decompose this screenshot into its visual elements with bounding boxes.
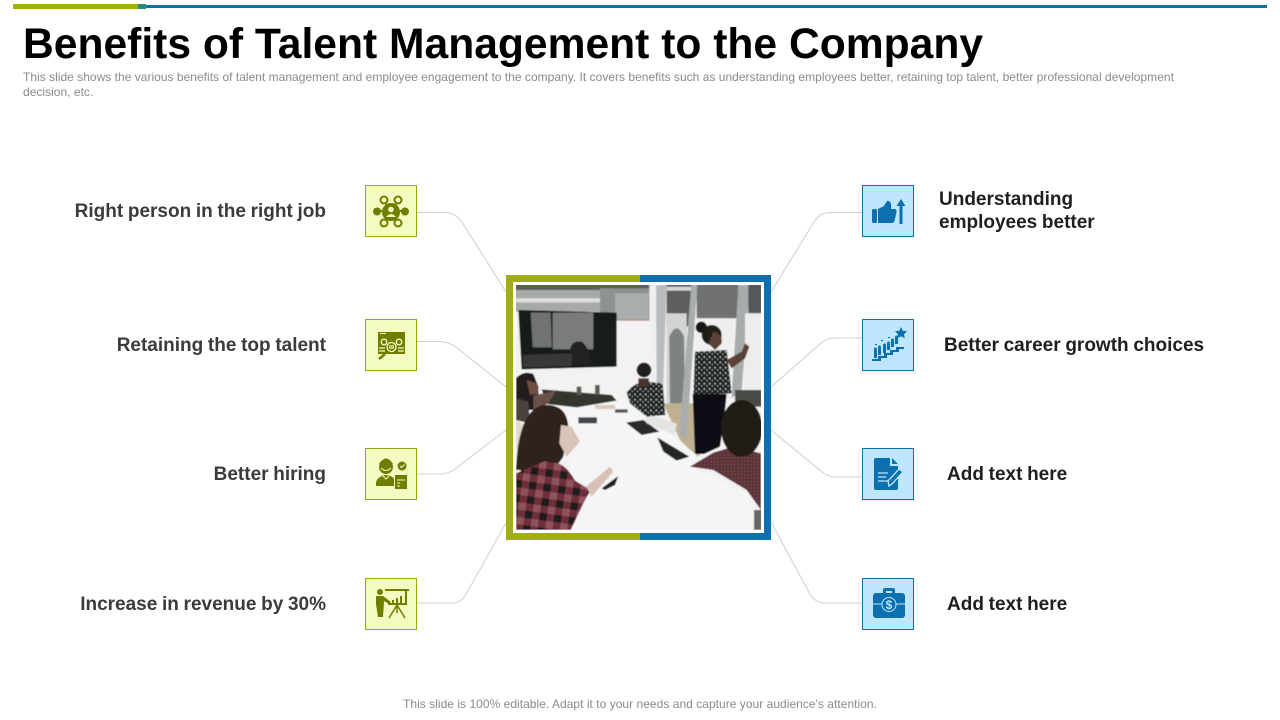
title: Benefits of Talent Management to the Company [23,20,983,68]
right label 4: Add text here [947,594,1067,615]
top accent bar [13,4,1267,9]
right label 1: Understanding [939,189,1073,210]
right icon box 4: briefcase with dollar: $ [886,598,893,612]
left label 3: Better hiring [214,464,326,485]
photo: team meeting around a white table [516,285,761,530]
central photo frame [506,275,771,540]
right icon box 1: thumbs up [862,185,914,237]
right label 1: employees better [939,212,1095,233]
right label 1 [939,189,1095,233]
subtitle text: This slide shows the various benefits of talent management and employee engagement to the company. It covers benefits such as understanding employees better, retaining top talent, better professional development decision, etc. [23,70,1174,99]
footer note: This slide is 100% editable. Adapt it to your needs and capture your audience's attention. [403,697,877,711]
right label 2: Better career growth choices [944,335,1204,356]
right icon box 3: document and pen [862,448,914,500]
left icon box 2: talent search [365,319,417,371]
left icon box 4: presenter with chart [365,578,417,630]
right icon box 2: career steps [862,319,914,371]
left icon box 1: people network [365,185,417,237]
right label 3: Add text here [947,464,1067,485]
left icon box 3: candidate check [365,448,417,500]
left label 1: Right person in the right job [75,201,326,222]
right icon box 4: briefcase with dollar [862,578,914,630]
left label 2: Retaining the top talent [117,335,326,356]
left label 4: Increase in revenue by 30% [80,594,326,615]
